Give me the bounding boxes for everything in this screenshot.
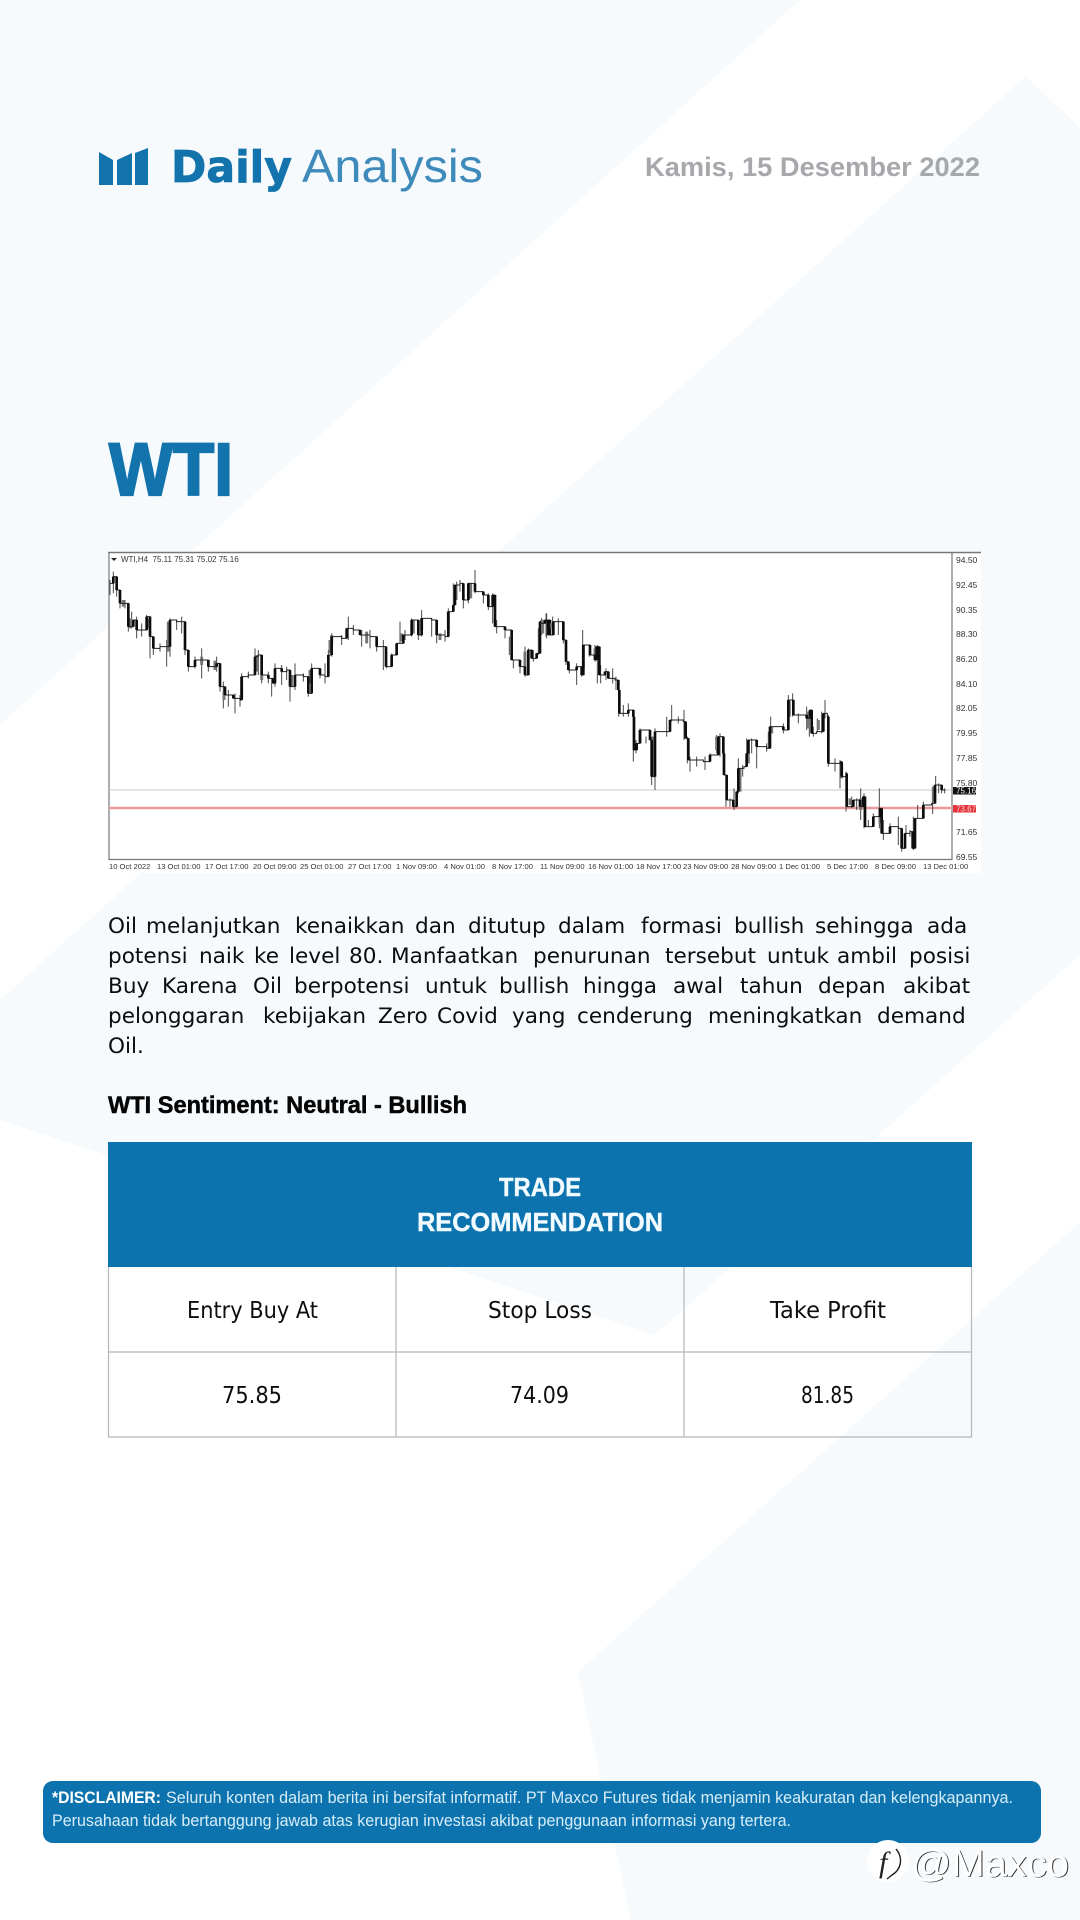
time axis: 4 Nov 01:00 — [444, 862, 485, 871]
analysis paragraph: hingga — [583, 974, 657, 999]
time axis: 8 Dec 09:00 — [875, 862, 916, 871]
disclaimer: Seluruh konten dalam berita ini bersifat informatif. PT Maxco Futures tidak menjamin keakuratan dan kelengkapannya. — [166, 1788, 1013, 1807]
price axis — [956, 555, 978, 862]
price axis: 71.65 — [956, 827, 978, 837]
analysis paragraph: penurunan — [533, 944, 651, 969]
time axis: 23 Nov 09:00 — [683, 862, 728, 871]
icon: watermark f bubble — [867, 1840, 909, 1882]
analysis paragraph: formasi — [641, 914, 722, 939]
watermark: @Maxco: @Maxco — [911, 1844, 1069, 1886]
analysis paragraph: Oil. — [108, 1034, 144, 1059]
table header: RECOMMENDATION — [417, 1207, 663, 1237]
analysis paragraph: dalam — [558, 914, 625, 939]
logo wordmark — [171, 140, 483, 193]
price axis: 94.50 — [956, 555, 978, 565]
analysis paragraph: Buy — [108, 974, 149, 999]
candles: mid November to December — [540, 613, 945, 852]
analysis paragraph: untuk — [425, 974, 488, 999]
analysis paragraph: yang — [512, 1004, 565, 1029]
analysis paragraph: posisi — [909, 944, 970, 969]
analysis paragraph: bullish — [499, 974, 569, 999]
time axis: 5 Dec 17:00 — [827, 862, 868, 871]
price axis: 90.35 — [956, 605, 978, 615]
time axis: 11 Nov 09:00 — [540, 862, 585, 871]
analysis paragraph: depan — [818, 974, 886, 999]
time axis: 28 Nov 09:00 — [731, 862, 776, 871]
icon: watermark f bubble: f — [879, 1846, 891, 1879]
analysis paragraph: level — [289, 944, 340, 969]
analysis paragraph: ambil — [837, 944, 897, 969]
chart: WTI H4 candlestick — [108, 551, 981, 873]
table labels — [187, 1298, 886, 1324]
time axis: 8 Nov 17:00 — [492, 862, 533, 871]
analysis paragraph: ke — [254, 944, 279, 969]
table header: TRADE — [499, 1172, 581, 1202]
analysis paragraph: Karena — [162, 974, 238, 999]
analysis paragraph: Covid — [437, 1004, 498, 1029]
price axis: 69.55 — [956, 852, 978, 862]
analysis paragraph: tersebut — [665, 944, 756, 969]
sentiment: WTI Sentiment: Neutral - Bullish — [108, 1092, 467, 1119]
time axis: 18 Nov 17:00 — [636, 862, 681, 871]
analysis paragraph: pelonggaran — [108, 1004, 244, 1029]
price axis: 82.05 — [956, 703, 978, 713]
analysis paragraph: cenderung — [577, 1004, 693, 1029]
analysis paragraph: untuk — [767, 944, 830, 969]
analysis paragraph: 80. — [349, 944, 383, 969]
price axis: 86.20 — [956, 654, 978, 664]
watermark: @Maxco: @Maxco — [912, 1844, 1070, 1886]
price axis: 84.10 — [956, 679, 978, 689]
price tag: red line: 73.67 — [956, 804, 977, 814]
analysis paragraph: sehingga — [815, 914, 914, 939]
table values: 81.85 — [801, 1383, 854, 1409]
icon: bar chart logo — [99, 148, 148, 185]
table header — [108, 1142, 972, 1267]
watermark: @Maxco — [867, 1840, 1070, 1886]
price axis: 79.95 — [956, 728, 978, 738]
chart symbol label: WTI,H4 75.11 75.31 75.02 75.16 — [121, 555, 239, 564]
time axis: 10 Oct 2022 — [109, 862, 150, 871]
analysis paragraph: Oil — [253, 974, 282, 999]
price axis: 77.85 — [956, 753, 978, 763]
analysis paragraph: demand — [877, 1004, 966, 1029]
analysis paragraph: kebijakan — [263, 1004, 366, 1029]
table labels: Stop Loss — [488, 1298, 592, 1324]
price tag: last price: 75.16 — [956, 786, 977, 796]
analysis paragraph: Oil — [108, 914, 137, 939]
analysis paragraph: melanjutkan — [146, 914, 280, 939]
table values: 75.85 — [222, 1383, 282, 1409]
table values — [222, 1383, 854, 1409]
candles: October to mid November — [110, 570, 550, 713]
analysis paragraph: kenaikkan — [295, 914, 404, 939]
logo: Daily Analysis — [99, 140, 483, 193]
logo wordmark: Analysis — [302, 140, 483, 192]
analysis paragraph: dan — [415, 914, 456, 939]
time axis: 17 Oct 17:00 — [205, 862, 248, 871]
logo wordmark: Daily — [171, 142, 292, 193]
heading: WTI: WTI — [109, 428, 233, 511]
analysis paragraph: Manfaatkan — [391, 944, 518, 969]
analysis paragraph: naik — [199, 944, 245, 969]
table labels: Take Profit — [769, 1298, 886, 1324]
disclaimer: *DISCLAIMER: — [52, 1788, 161, 1807]
table labels: Entry Buy At — [187, 1298, 318, 1324]
time axis: 20 Oct 09:00 — [253, 862, 296, 871]
analysis paragraph: akibat — [903, 974, 970, 999]
time axis: 1 Dec 01:00 — [779, 862, 820, 871]
analysis paragraph: meningkatkan — [708, 1004, 862, 1029]
time axis: 27 Oct 17:00 — [348, 862, 391, 871]
disclaimer — [43, 1781, 1041, 1843]
time axis: 1 Nov 09:00 — [396, 862, 437, 871]
analysis paragraph: ada — [927, 914, 967, 939]
analysis paragraph: tahun — [740, 974, 803, 999]
analysis paragraph: bullish — [734, 914, 804, 939]
analysis paragraph: potensi — [108, 944, 188, 969]
time axis: 13 Oct 01:00 — [157, 862, 200, 871]
table values: 74.09 — [510, 1383, 569, 1409]
time axis: 13 Dec 01:00 — [923, 862, 968, 871]
price axis: 92.45 — [956, 580, 978, 590]
analysis paragraph: ditutup — [468, 914, 546, 939]
price axis: 75.80 — [956, 778, 978, 788]
analysis paragraph: awal — [673, 974, 723, 999]
analysis paragraph: berpotensi — [294, 974, 409, 999]
price axis: 88.30 — [956, 629, 978, 639]
table: trade recommendation — [108, 1142, 972, 1437]
date: Kamis, 15 Desember 2022 — [645, 152, 980, 182]
time axis: 16 Nov 01:00 — [588, 862, 633, 871]
time axis: 25 Oct 01:00 — [300, 862, 343, 871]
time axis — [109, 862, 968, 871]
disclaimer: Perusahaan tidak bertanggung jawab atas kerugian investasi akibat penggunaan informasi yang tertera. — [52, 1811, 791, 1830]
analysis paragraph: Zero — [378, 1004, 428, 1029]
